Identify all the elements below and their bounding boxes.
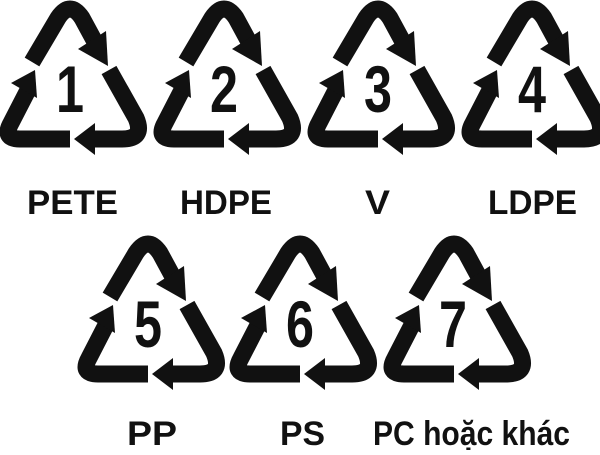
symbol 5 PP: [86, 244, 217, 453]
symbol 1 PETE: PETE: [27, 184, 118, 222]
symbol 7 PC hoac khac: [373, 244, 570, 453]
symbol 7 PC hoac khac: 7: [439, 287, 467, 361]
symbol 5 PP: 5: [134, 287, 162, 361]
symbol 4 LDPE: 4: [518, 52, 546, 126]
symbol 2 HDPE: HDPE: [180, 184, 272, 222]
symbol 6 PS: 6: [286, 287, 314, 361]
symbol 3 V: V: [365, 184, 390, 222]
symbol 3 V: 3: [364, 52, 392, 126]
symbol 2 HDPE: [162, 9, 293, 222]
symbol 1 PETE: 1: [56, 52, 84, 126]
symbol 6 PS: [238, 244, 369, 453]
symbol 1 PETE: [8, 9, 139, 222]
symbol 4 LDPE: [470, 9, 600, 222]
symbol 3 V: [316, 9, 447, 222]
symbol 2 HDPE: 2: [210, 52, 238, 126]
symbol 4 LDPE: LDPE: [488, 184, 577, 222]
